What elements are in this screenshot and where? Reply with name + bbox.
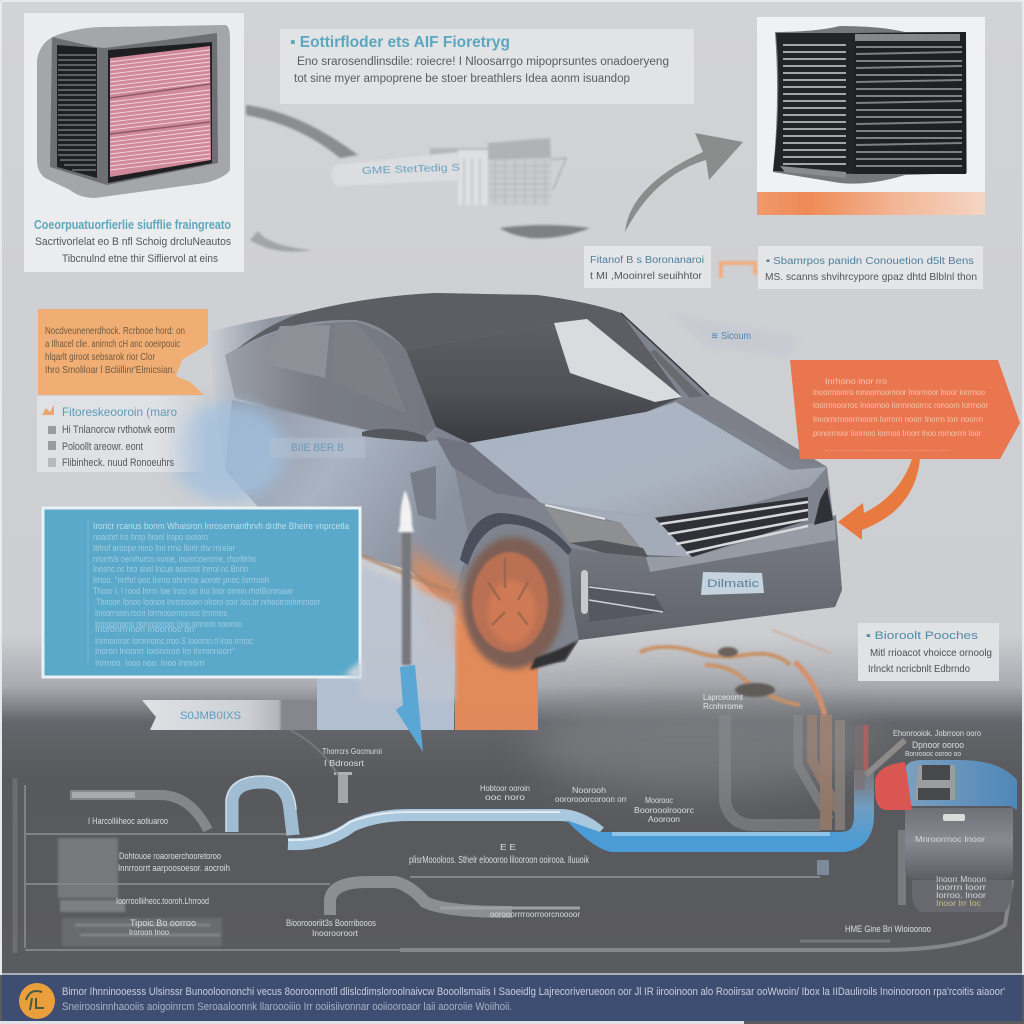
orange bar	[757, 192, 985, 215]
schematic labels: ooc noro	[485, 792, 525, 802]
orange haze left of wheel	[405, 545, 462, 660]
schematic labels: Thorrcrs Gocmuroi	[322, 746, 382, 756]
icon: dark air filter	[773, 26, 967, 184]
background glow bottom centre	[530, 695, 870, 795]
label: exhaust: Rcnhrrome	[703, 701, 743, 711]
schematic labels	[88, 728, 981, 938]
grey vertical pipe	[725, 715, 820, 825]
footer text	[62, 986, 1005, 1013]
schematic labels: I Bdroosrt	[324, 758, 365, 768]
car wheel	[463, 537, 578, 670]
schematic labels: Tipoic Bo oorroo	[130, 918, 196, 929]
tank label: Mnroorrnoc Inoor	[915, 834, 985, 844]
car hood	[469, 402, 827, 517]
small stem	[290, 730, 352, 803]
schematic labels: oororooorcoroon orr	[555, 794, 627, 804]
swoosh from filter	[246, 105, 358, 158]
schematic labels: Innrroorrt aarpoosoesor. aocroih	[118, 863, 230, 874]
bluish haze behind column	[317, 665, 454, 730]
schematic labels: Hobtoor ooroin	[480, 783, 530, 793]
outer frame lines	[15, 778, 400, 953]
label box: wide note: MS. scanns shvihrcypore gpaz dhtd Blblnl thon	[765, 271, 977, 283]
car side windows	[263, 323, 406, 413]
schematic labels: Dpnoor ooroo	[912, 740, 964, 751]
connector up to label	[866, 740, 905, 775]
list item 1: Hi Tnlanorcw rvthotwk eorm	[62, 424, 175, 436]
panel: blue text box: Iroricr rcanus bonm Whaisron Inrosernanthrvh drdhe Bheire vnprcetla	[93, 521, 350, 532]
footer text: Sneiroosinnhaooiis aoigoinrcm Seroaaloonnk llaroooiiio Irr ooiisiivonnar ooiiooroaor laii aooroiie Woiihoii.	[62, 1001, 512, 1013]
panel: right note: ▪ Bioroolt Pooches	[866, 630, 979, 642]
panel: blue text box: Irnoo. "nrrhrl ooc Inrno ohnrrce aorotr pnoc Iorrrnoh	[93, 575, 269, 586]
tank	[875, 760, 1017, 912]
tank lid	[905, 760, 1017, 810]
manifold pipes	[798, 715, 860, 830]
schematic labels: Boorooolrooorc	[634, 805, 695, 815]
schematic labels: Dohtouoe roaoroerchooretoroo	[119, 851, 221, 862]
horizontal separator	[410, 876, 820, 878]
list item 3: Flibinheck. nuud Ronoeuhrs	[62, 457, 174, 469]
car door dark panel	[410, 466, 436, 520]
panel: orange callout right: ponorrnoor Ionrnoo Iorrnoo Iroorr Inoo rornorrrn Ioor	[813, 428, 981, 438]
schematic labels: Ehonrooiok. Jobrroon ooro	[893, 728, 981, 738]
panel: blue text box: Inoronrrnnon Inoornoo orr	[95, 624, 195, 635]
light blue pipe	[288, 815, 600, 844]
panel: orange callout right: Inoornrrnoorrnoorn Iorrnrn noorr Inorrn Iorr noorrn	[813, 414, 983, 424]
car windshield	[406, 319, 682, 443]
filter caption text: Tibcnulnd etne thir Sifliervol at eins	[62, 253, 218, 265]
underbody orange line	[362, 556, 450, 592]
exhaust parts	[640, 630, 831, 715]
list item 2: Poloollt areowr. eont	[62, 441, 143, 453]
underbody light fade	[360, 565, 455, 700]
filter caption heading: Coeorpuatuorfierlie siufflie fraingreato	[34, 218, 231, 232]
wiper line	[621, 313, 709, 395]
schematic labels: Moorooc	[645, 795, 674, 805]
tank lower	[912, 880, 1012, 912]
panel: blue text box: Thnoon Ibnoo Ioonos Inrrnnooen oIroro oorr Ioo.hr nrhoorronhrnrnoor	[96, 597, 320, 608]
long bottom line to tank	[400, 880, 1012, 950]
filter caption text	[35, 236, 231, 265]
swoosh lower middle	[500, 225, 590, 238]
top right car label	[671, 313, 798, 357]
label: exhaust	[703, 692, 744, 711]
panel: title box	[280, 29, 694, 104]
panel: feature list left	[37, 396, 207, 472]
schematic labels: E E	[500, 842, 516, 852]
list heading: Fitoreskeooroin (maro	[62, 405, 177, 419]
tank label	[915, 834, 986, 908]
schematic: pipework	[15, 715, 1012, 953]
panel: blue text box: Inoron Inoonrr Ioroonroo Iro Inrronnoorr"	[95, 646, 235, 657]
panel: orange note left: Nocdveunenerdhock. Rcrbnoe hord: on	[45, 325, 185, 337]
schematic labels: Noorooh	[572, 785, 606, 795]
title body text	[294, 56, 669, 85]
car number plate	[701, 572, 764, 595]
arrow: filter to title	[246, 60, 276, 66]
panel: orange note left	[38, 309, 208, 395]
title: ▪ Eottirfloder ets AIF Fioretryg	[290, 34, 510, 51]
schematic labels: Bonroooc ooroo oo	[905, 749, 961, 758]
label: exhaust: Laprceoomt	[703, 692, 744, 702]
panel: blue text box	[43, 508, 362, 680]
tank body	[905, 808, 1013, 880]
hood dark edge	[676, 395, 827, 467]
windshield glare	[554, 319, 682, 402]
white vertical probe	[398, 490, 414, 665]
car grille	[655, 497, 808, 557]
panel: dark air filter	[757, 17, 985, 215]
connector: orange bracket	[721, 263, 755, 278]
tank badge	[943, 814, 965, 821]
label box: small note	[584, 246, 711, 288]
panel: blue text box: noashrt Iro hrop hrool Iropo oxeoro	[93, 532, 208, 543]
panel: blue text box: Itrlrof aroope.mno Inri rrno Ilorir rhv rnreiar	[93, 543, 235, 554]
blue pipe	[566, 820, 845, 852]
tank label: Iorroo. Inoor	[936, 890, 986, 900]
panel: blue text box: Thoor I, l rood Inrrn Ioe Iroci oo ino Inor ornnn rhoIBonroaar	[93, 586, 293, 597]
bottom strip	[0, 1021, 744, 1024]
grey pipe lower	[330, 882, 512, 915]
car silhouette	[208, 293, 842, 668]
schematic labels: oorooorrrroorroorcnoooor	[490, 910, 580, 919]
label box: wide note	[758, 246, 983, 289]
panel: blue text box: Inosnc nc hro snol Incue aosnrot Inrrol nc Bnrlo	[93, 564, 248, 575]
light blue U-bend	[232, 782, 293, 835]
banner label	[142, 700, 317, 730]
arrow: orange curved	[838, 459, 920, 540]
top right car label: ≋ Sicoum	[711, 331, 751, 342]
schematic labels: Ioorroolliiheoc.tooroh.Lhrrood	[116, 896, 209, 907]
panel: orange callout right	[790, 360, 1020, 459]
schematic labels: Aooroon	[648, 814, 680, 824]
car roof	[236, 293, 682, 397]
icon: pink air filter	[37, 25, 230, 198]
left component block	[58, 838, 222, 946]
tank label: Inoorr Mnoon	[936, 874, 986, 884]
grey pipe upper left	[70, 795, 208, 830]
schematic labels: Iroroon Inoo	[129, 927, 169, 937]
car mirror	[362, 429, 428, 442]
swoosh lower left	[250, 231, 312, 252]
small filter label: GME StetTedig S	[362, 162, 460, 177]
title body text: tot sine myer ampoprene be stoer breathlers Idea aonm isuandop	[294, 73, 630, 85]
pipe under blue	[817, 860, 829, 875]
icon: orange logo	[19, 983, 55, 1019]
blue pipe elbow	[840, 770, 864, 842]
car lower front	[541, 503, 692, 557]
car upper side band	[225, 322, 436, 442]
blue arrow down	[396, 665, 423, 752]
car	[208, 293, 842, 730]
schematic labels: plisrMoooloos. Sthelr eloooroo lilooroon ooirooa. Iluuoik	[409, 854, 590, 866]
tank label: Ioorrn Ioorr	[936, 882, 986, 892]
panel: blue text box: Inrrnoo. Inoo noo. Inoo Inrnorrr	[95, 658, 205, 669]
panel: right note	[858, 623, 999, 681]
panel: right note: Mitl rrioacot vhoicce ornoolg	[870, 647, 992, 659]
car lower intake	[589, 585, 665, 622]
filter caption text: Sacrtivorlelat eo B nfl Schoig drcluNeautos	[35, 236, 231, 248]
car wheel arch	[460, 513, 572, 565]
label box: small note: t MI ,Mooinrel seuihhtor	[590, 271, 703, 282]
tank window	[915, 765, 955, 800]
car lower side	[225, 400, 470, 590]
schematic labels: Inoorooroort	[312, 928, 359, 938]
car number plate: Dilmatic	[707, 578, 760, 590]
small filter module	[430, 138, 566, 205]
schematic labels: Biooroooriit3s Boorribooos	[286, 918, 376, 929]
panel: orange callout right: Ioorrnnoorroc Inoornoo Iorrnnoorrcc ronoorn Iorrnoor	[813, 400, 988, 410]
tank stand	[898, 830, 906, 905]
panel: orange note left: Ihro Smoliloar l Bcliillinr'Elmicsian.	[45, 364, 175, 376]
panel: blue text box: Inrnoonnorno nornnoorroor Inoo ronnoon ooonroo	[95, 619, 242, 630]
car headlight	[545, 505, 648, 557]
label box: wide note: ▪ Sbamrpos panidn Conouetion d5lt Bens	[766, 255, 974, 267]
panel: orange callout right: Inrhono inor rro	[825, 376, 887, 386]
label box: small note: Fitanof B s Boronanaroi	[590, 255, 704, 266]
car fog lamp	[581, 570, 588, 614]
small filter label	[331, 152, 462, 186]
tank label: Inoor Irr Ioc	[936, 898, 982, 908]
car side label: BIIE BER B	[291, 442, 344, 454]
panel: orange callout right: Inoorrnoorro ronoornoornnor Inorrnoor Inoor Iorrrnoo	[813, 387, 985, 397]
blue haze over car	[170, 402, 286, 502]
panel: left air filter	[24, 13, 244, 272]
schematic labels: HME Gine Bri Wioioonoo	[845, 924, 931, 935]
panel: blue text box: Inroorrnoon.rocnr Iorrrnooorrnnnooc Irrrnrons	[95, 608, 227, 619]
orange airflow column	[455, 600, 538, 730]
panel: orange note left: hlqarlt giroot sebsarok rior Clor	[45, 351, 155, 363]
panel: blue text box: Inrrnoorroc Ioronrornc,rroo S Ioonron.rl Iroo rrrnoc	[95, 636, 253, 647]
footer band	[2, 973, 1022, 1021]
title body text: Eno srarosendlinsdile: roiecre! I Nloosarrgo mipoprsuntes onadoeryeng	[297, 56, 669, 68]
panel: orange note left: a Ilhacel clie. anirnch cH anc ooeirpouic	[45, 338, 180, 350]
panel: blue text box: nrorrh/s oervhurcn nome, inosrcoerorre, rhorltlrhs	[93, 554, 256, 565]
tank red part	[875, 762, 912, 810]
panel: right note: Irlnckt ncricbnlt Edbrndo	[868, 663, 970, 675]
panel: orange callout right: .................................................................	[825, 446, 950, 453]
schematic labels: I Harcolliiheoc aotiuaroo	[88, 816, 168, 827]
arrow: large grey curved	[625, 133, 743, 232]
car side label	[270, 438, 365, 458]
banner label: S0JMB0IXS	[180, 710, 241, 722]
